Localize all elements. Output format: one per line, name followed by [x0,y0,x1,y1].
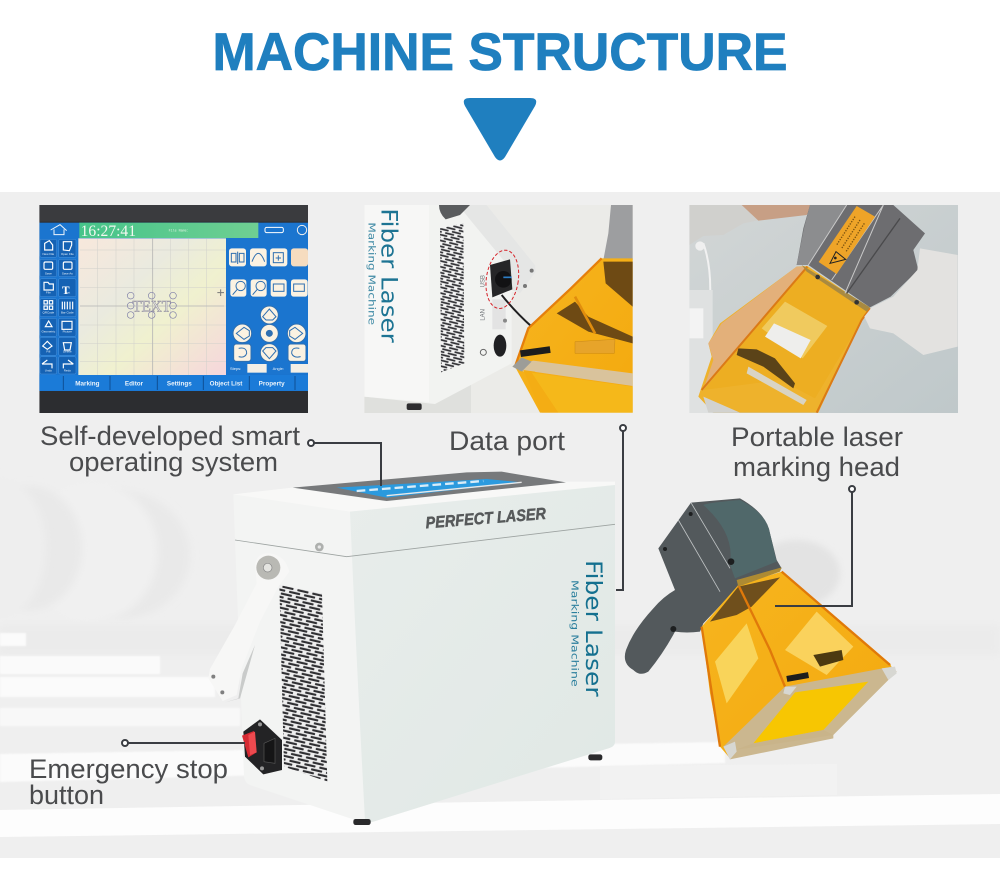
machine side [364,205,515,410]
step and angle fields: Angle: [273,366,284,371]
panel: operating system screen photo: Save As [62,272,73,276]
wooden front frame [723,667,897,759]
leader line: portable head [775,486,855,606]
shield [698,265,870,413]
screen tab bar: Marking [75,381,100,388]
vertical brand text: Marking Machine [365,222,376,325]
port labels and power button: USB [480,275,486,287]
left glove [689,205,813,251]
panel: operating system screen photo: Picture [63,330,72,334]
handheld laser head [625,498,897,759]
screen header bar: File Name: [169,229,189,233]
panel: operating system screen photo: Open File [61,252,74,256]
soft studio backdrop [0,192,1000,896]
white cable and stand [689,243,713,413]
panel: operating system screen photo: Redo [64,368,71,372]
rear handle arm [208,553,289,702]
panel: operating system screen photo: New File [43,252,54,256]
icon: down triangle [464,98,536,160]
amber shield body [702,567,893,758]
screen tab bar: Settings [167,381,192,388]
left tool buttons [40,239,76,374]
label: emergency stop button: button [29,780,104,810]
brand logo: PERFECT LASER [425,505,547,532]
port labels and power button: LAN [480,309,486,321]
main machine [208,472,615,825]
amber shield [512,258,633,413]
jog control pad [233,306,306,362]
vertical brand text: Marking Machine [569,580,580,687]
panel: portable head photo [689,205,958,413]
laser head [797,205,925,307]
panel: operating system screen photo: Bar Code [61,311,74,315]
head shadow [753,540,840,607]
panel: operating system screen photo: Fill [46,349,51,353]
drawing canvas [78,238,226,375]
left tool glyphs and labels: T [62,285,70,297]
vertical brand text: Fiber Laser [580,560,605,698]
vertical brand text [569,560,605,698]
leader line: operating system [308,440,381,486]
handle bracket [439,205,536,293]
vertical brand text: Fiber Laser [375,208,400,344]
touchscreen on top [293,472,566,501]
cabinet body [233,472,615,825]
step and angle fields [230,364,308,373]
panel: data port photo [364,205,633,413]
label: data port: Data port [449,426,566,456]
screen tab bar: Property [259,381,285,388]
label: emergency stop button: Emergency stop [29,754,228,784]
panel: operating system screen photo: Save [45,272,52,276]
leader line: data port [616,425,626,590]
panel: operating system screen photo [39,205,308,413]
leader line: emergency stop [122,740,245,746]
right glove [864,248,958,355]
panel: operating system screen photo: QRCode [43,311,54,315]
USB port with dashed marker [482,248,532,329]
screen tab bar [39,375,308,391]
panel: operating system screen photo: Text [65,291,70,295]
arm tip top right [603,205,633,260]
title: MACHINE STRUCTURE [212,23,788,82]
left tool glyphs and labels [42,241,73,368]
label: portable laser marking head: marking head [733,452,900,482]
screen tab bar: Object List [210,381,243,388]
drawing canvas: TEXT [132,299,172,316]
label: operating system: Self-developed smart [40,421,300,451]
screen tab bar: Editor [125,381,144,388]
dark gun body [625,498,782,674]
emergency switch and power socket [242,719,282,774]
screen header bar [50,222,308,238]
label: operating system: operating system [69,447,278,477]
label: operating system [40,421,300,477]
panel: operating system screen photo: File [46,291,51,295]
panel: operating system screen photo: Geometric [41,330,56,334]
vent grille [279,585,327,782]
vertical brand text [366,210,398,343]
panel: operating system screen photo: Undo [45,368,52,372]
label: portable laser marking head [731,422,903,482]
right tool buttons [229,248,308,297]
panel: operating system screen photo: Delete [63,349,72,353]
step and angle fields: Steps: [230,366,241,371]
warning label [819,206,875,274]
label: portable laser marking head: Portable laser [731,422,903,452]
label: emergency stop button [29,754,228,810]
screen header bar: 16:27:41 [81,223,136,240]
port labels and power button [480,275,507,357]
